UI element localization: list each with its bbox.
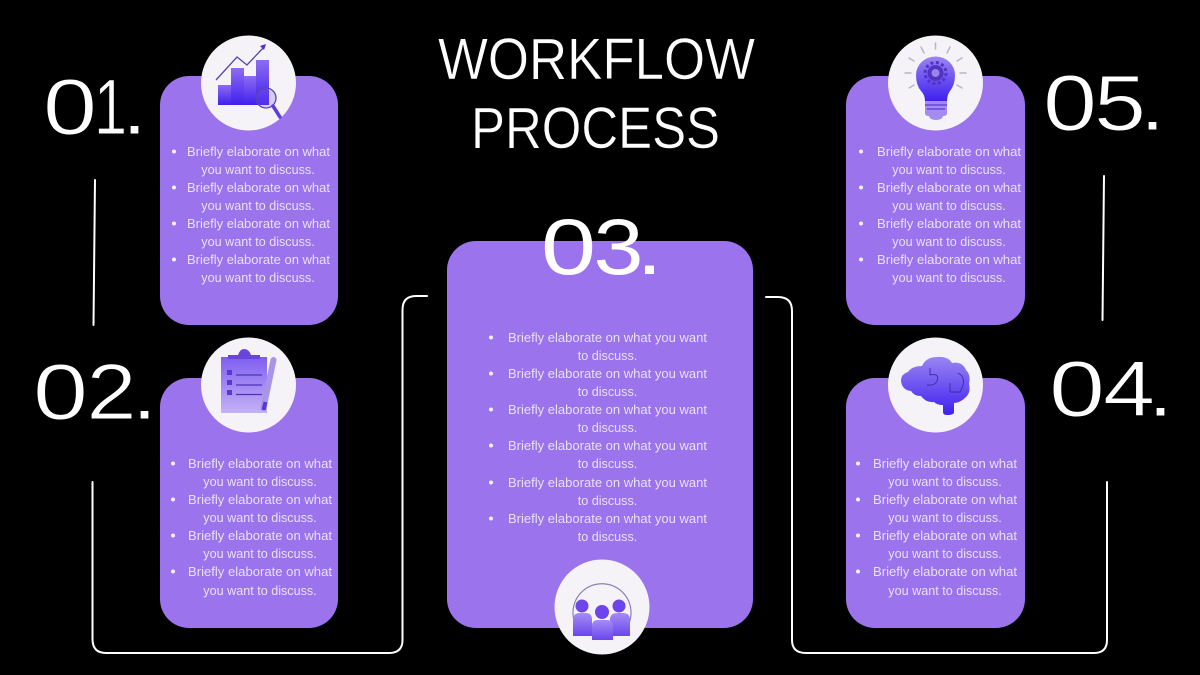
icon: bar chart with magnifier [201,36,296,130]
bullet list: step 02: Briefly elaborate on what [188,457,333,471]
bullet list: step 04 [856,457,1018,598]
bullet list: step 02: Briefly elaborate on what [188,565,333,579]
bullet list: step 04: Briefly elaborate on what [873,565,1018,579]
bullet list: step 03: Briefly elaborate on what you want [508,512,708,526]
step number 03: 0 [541,202,596,291]
title: PROCESS [471,96,720,161]
bullet list: step 02: you want to discuss. [203,511,317,525]
connector: 02 to 03 [92,296,427,653]
bullet list: step 05: you want to discuss. [892,163,1006,177]
title: WORKFLOW [438,27,755,92]
panel: step 04 [846,338,1025,628]
bullet list: step 05 [859,145,1022,285]
step number 01: 1 [94,62,127,151]
bullet list: step 01: Briefly elaborate on what [187,181,331,195]
connector: 01 to 02 [94,180,95,325]
bullet list: step 02: you want to discuss. [203,584,317,598]
bullet list: step 01: you want to discuss. [201,235,315,249]
step number 05: 0 [1043,58,1097,147]
bullet list: step 05: you want to discuss. [892,199,1006,213]
step number 03 [541,202,662,291]
step number 03: 3 [594,202,644,291]
bullet list: step 02: you want to discuss. [203,475,317,489]
step number 05 [1043,58,1166,147]
bullet list: step 01: you want to discuss. [201,199,315,213]
bullet list: step 05: you want to discuss. [892,235,1006,249]
step number 01 [43,62,148,151]
connector: 03 to 04 [766,297,1107,653]
step number 04: 0 [1049,344,1105,433]
step number 04 [1049,344,1174,433]
step number 01: 0 [43,62,97,151]
bullet list: step 03 [489,331,708,544]
bullet list: step 01 [172,145,331,285]
step number 02: . [132,347,158,436]
icon: brain [888,338,983,432]
bullet list: step 02: Briefly elaborate on what [188,493,333,507]
bullet list: step 04: you want to discuss. [888,511,1002,525]
step number 02: 2 [86,347,136,436]
bullet list: step 02: you want to discuss. [203,547,317,561]
bullet list: step 03: to discuss. [578,530,637,544]
step number 05: 5 [1094,58,1146,147]
step number 04: 4 [1103,344,1155,433]
bullet list: step 04: Briefly elaborate on what [873,529,1018,543]
bullet list: step 01: you want to discuss. [201,271,315,285]
bullet list: step 03: Briefly elaborate on what you want [508,367,708,381]
bullet list: step 03: Briefly elaborate on what you want [508,476,708,490]
bullet list: step 01: you want to discuss. [201,163,315,177]
step number 05: . [1140,58,1166,147]
bullet list: step 03: Briefly elaborate on what you want [508,331,708,345]
step number 04: . [1148,344,1174,433]
bullet list: step 05: Briefly elaborate on what [877,253,1022,267]
bullet list: step 01: Briefly elaborate on what [187,253,331,267]
bullet list: step 04: you want to discuss. [888,547,1002,561]
step number 02: 0 [33,347,88,436]
bullet list: step 02: Briefly elaborate on what [188,529,333,543]
bullet list: step 03: to discuss. [578,421,637,435]
bullet list: step 03: to discuss. [578,494,637,508]
bullet list: step 03: Briefly elaborate on what you want [508,403,708,417]
title [438,27,755,161]
panel: step 03 [447,202,753,654]
bullet list: step 04: you want to discuss. [888,584,1002,598]
bullet list: step 03: to discuss. [578,349,637,363]
panel: step 01 [160,36,338,325]
bullet list: step 03: to discuss. [578,457,637,471]
bullet list: step 03: to discuss. [578,385,637,399]
icon: team of three people [554,560,650,654]
bullet list: step 01: Briefly elaborate on what [187,145,331,159]
bullet list: step 05: Briefly elaborate on what [877,217,1022,231]
connector: 05 to 04 [1102,176,1104,320]
bullet list: step 01: Briefly elaborate on what [187,217,331,231]
bullet list: step 04: you want to discuss. [888,475,1002,489]
panel: step 05 [846,36,1025,325]
bullet list: step 03: Briefly elaborate on what you want [508,439,708,453]
step number 02 [33,347,158,436]
bullet list: step 04: Briefly elaborate on what [873,457,1018,471]
icon: clipboard checklist [201,338,296,432]
panel: step 02 [160,338,338,628]
bullet list: step 04: Briefly elaborate on what [873,493,1018,507]
bullet list: step 05: you want to discuss. [892,271,1006,285]
bullet list: step 05: Briefly elaborate on what [877,181,1022,195]
icon: light bulb with gear [888,36,983,130]
step number 01: . [122,62,148,151]
bullet list: step 05: Briefly elaborate on what [877,145,1022,159]
bullet list: step 02 [171,457,333,598]
step number 03: . [636,202,662,291]
